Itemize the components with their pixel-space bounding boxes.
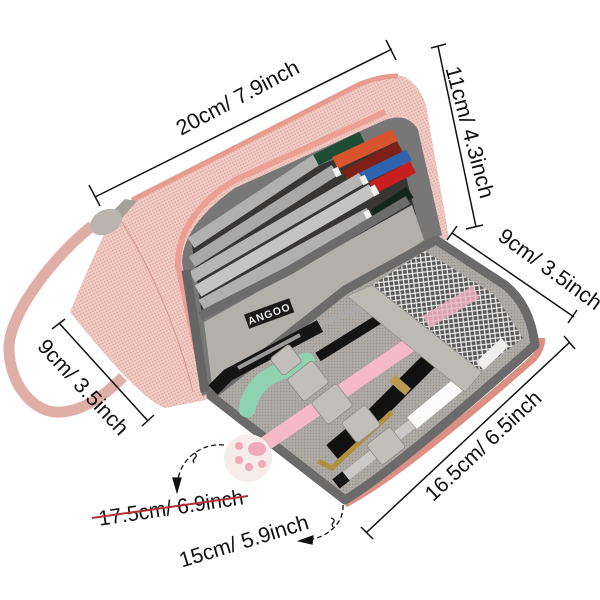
arrow: pen length bottom [299,505,343,544]
dimension: flap length: 16.5cm/ 6.5inch [420,386,546,506]
crossed-out length: 17.5cm/ 6.9inch [97,485,245,531]
corrected length: 15cm/ 5.9inch [176,510,312,572]
dimension: width [89,40,396,206]
white marker [412,385,458,423]
dimension: left depth: 9cm/ 3.5inch [33,334,133,440]
icon: paw pen cap [224,434,272,482]
silver pen [346,424,412,476]
dimension: right depth [447,224,600,323]
arrow: pen length top [173,445,224,492]
elastic loops [270,344,406,465]
fountain pen [332,410,382,452]
dimension: flap length [361,336,575,539]
dimension: width: 20cm/ 7.9inch [172,55,303,140]
panel: upper compartment [182,118,442,396]
panel: pink case body [70,75,449,408]
icon: wrist strap [9,226,123,412]
pencils [191,135,413,306]
black pens [213,326,320,390]
icon: zipper pull [85,199,137,241]
panel: lower open flap [211,240,542,504]
mesh pocket [372,251,523,378]
dimension: height [431,44,499,229]
pink pen [262,342,414,446]
logo label: ANGOO [246,301,293,328]
strap [347,285,482,392]
green pen [247,361,306,409]
dimension: height: 11cm/ 4.3inch [441,63,499,201]
